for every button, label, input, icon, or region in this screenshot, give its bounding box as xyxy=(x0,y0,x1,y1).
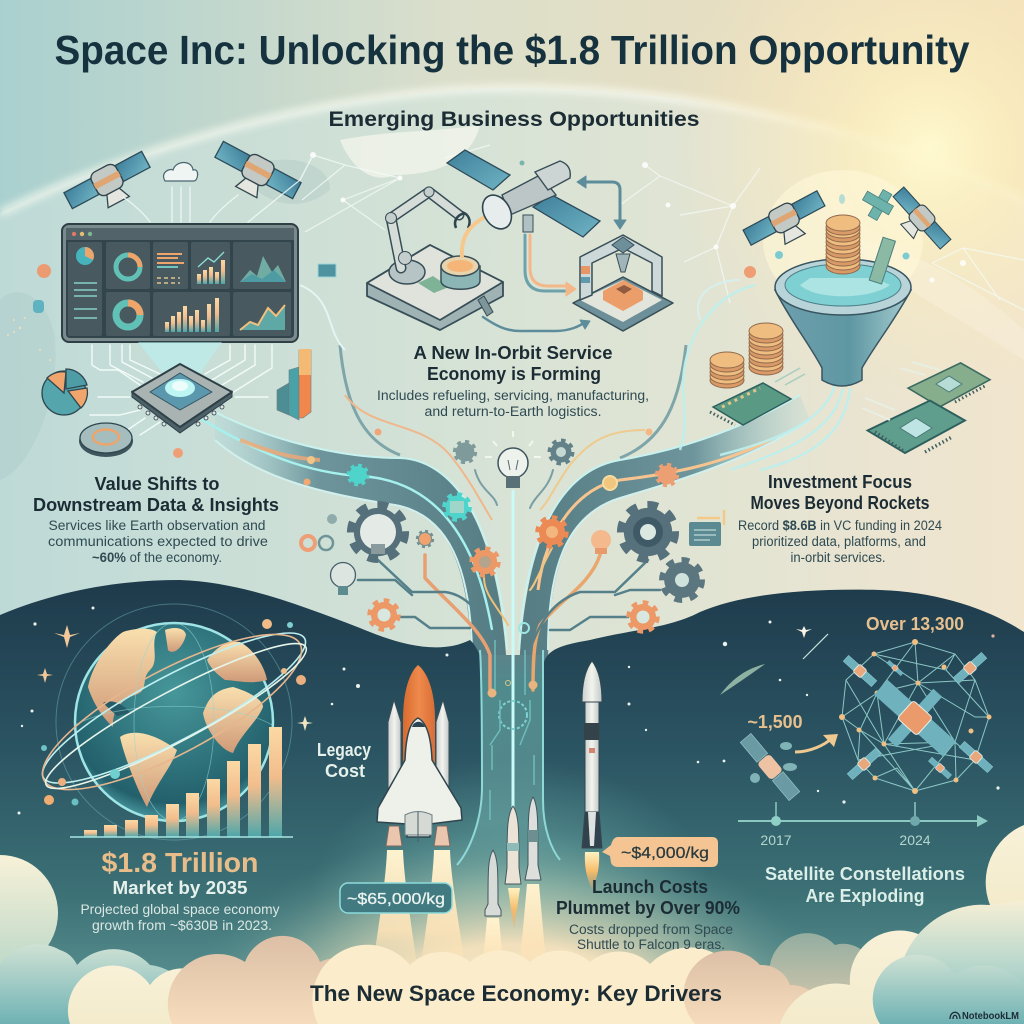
funnel glow xyxy=(763,170,923,310)
stat: 1.8 trillion: $1.8 Trillion xyxy=(102,847,258,878)
icon: big gear right xyxy=(622,506,674,558)
text: launch costs: Costs dropped from Space xyxy=(569,922,733,937)
icon: pie chart xyxy=(42,369,87,415)
stars xyxy=(342,642,727,763)
text: investment focus: Investment Focus xyxy=(768,472,912,492)
icon: satellite left xyxy=(62,148,158,223)
cloud: left low cream xyxy=(68,966,270,1024)
network nodes xyxy=(310,152,966,282)
timeline: 2024 xyxy=(899,832,931,848)
cloud: left cream xyxy=(0,855,58,971)
text: in-orbit service: A New In-Orbit Service xyxy=(414,343,612,363)
text: value shifts xyxy=(33,474,279,565)
icon: orange gear lower right xyxy=(629,603,657,631)
legacy cost label xyxy=(317,740,371,781)
panel: downstream data illustration xyxy=(33,138,336,458)
panel: market growth globe xyxy=(18,604,333,933)
icon: teal node on band xyxy=(348,465,368,485)
cloud: left peach xyxy=(168,936,400,1024)
text: market by 2035: growth from ~$630B in 2023. xyxy=(92,918,272,933)
icon: 3d bars xyxy=(277,349,311,420)
text: value shifts: communications expected to drive xyxy=(48,534,268,549)
text: in-orbit service: and return-to-Earth logistics. xyxy=(424,404,602,419)
text: value shifts: ~60% of the economy. xyxy=(92,550,222,565)
circuit traces: column xyxy=(490,640,534,820)
text: launch costs xyxy=(556,877,740,952)
legacy cost label: Cost xyxy=(325,761,365,781)
label: about 1,500: ~1,500 xyxy=(748,712,802,732)
gears and circuit tree xyxy=(301,431,724,880)
globe halo xyxy=(56,604,292,840)
text: investment focus: in-orbit services. xyxy=(790,550,886,565)
cloud: right large cream xyxy=(780,931,993,1024)
icon: gear top right xyxy=(550,440,572,464)
cloud: centre xyxy=(312,945,744,1024)
panel: in-orbit service illustration xyxy=(367,150,673,331)
panel: investment funnel illustration xyxy=(710,170,990,453)
globe xyxy=(75,623,273,821)
cloud: right big xyxy=(898,900,1024,1024)
bar chart: market growth xyxy=(70,727,293,837)
icon: disc xyxy=(79,423,133,457)
icon: components xyxy=(775,190,910,260)
icon: big gear with bulb xyxy=(352,506,404,558)
footer heading: The New Space Economy: Key Drivers xyxy=(310,981,722,1006)
dark lower section xyxy=(0,580,1024,1024)
text: in-orbit service: Includes refueling, servicing, manufacturing, xyxy=(377,388,649,403)
arcs around centre xyxy=(300,280,740,520)
icon: falcon 9 rocket xyxy=(582,661,602,848)
text: launch costs: Shuttle to Falcon 9 eras. xyxy=(577,937,725,952)
chip xyxy=(132,364,232,433)
icon: orange gear centre left xyxy=(472,549,498,575)
central glowing line xyxy=(512,490,514,880)
icon: coin stack short xyxy=(710,352,744,388)
text: investment focus: Moves Beyond Rockets xyxy=(750,493,930,513)
icon: gear top left xyxy=(455,442,475,462)
icon: satellite right xyxy=(207,138,303,213)
icon: orange gear on right band xyxy=(538,518,566,546)
icon: card falling into funnel xyxy=(869,237,895,284)
cloud: right peach xyxy=(684,951,830,1024)
icon: yellow ring node xyxy=(603,476,617,490)
flow band: right xyxy=(519,395,810,670)
circuit connectors xyxy=(90,345,272,435)
text: value shifts: Value Shifts to xyxy=(94,474,220,494)
signal lines xyxy=(123,155,313,222)
price pill: legacy xyxy=(340,883,452,913)
text: launch costs: Launch Costs xyxy=(592,877,708,897)
central column xyxy=(457,650,560,865)
robot platform xyxy=(367,187,503,330)
arrow: growth xyxy=(795,734,838,752)
arrows: service loop xyxy=(483,176,626,331)
text: investment focus xyxy=(738,472,942,565)
flow band: left xyxy=(200,412,507,670)
text: satellite constellations xyxy=(765,864,965,906)
icon: central lightbulb xyxy=(485,431,541,488)
icon: small bulb left xyxy=(330,562,356,595)
glowing flow from funnel xyxy=(680,285,850,470)
icon: small badges xyxy=(33,264,336,458)
icon: satellite right of funnel xyxy=(884,185,953,258)
network sphere xyxy=(839,639,992,794)
text: satellite constellations: Satellite Constellations xyxy=(765,864,965,884)
icon: satellite left of funnel xyxy=(741,187,832,259)
icon: circuit board right xyxy=(900,362,990,407)
panel: satellite constellations xyxy=(720,614,1000,906)
flames: small rockets xyxy=(481,884,548,985)
stars and comet xyxy=(720,620,1000,804)
price pill: legacy: ~$65,000/kg xyxy=(347,891,445,908)
icon: teal gear on band xyxy=(444,494,470,520)
icon: circuit board front xyxy=(862,398,965,453)
funnel body xyxy=(775,259,911,386)
panel: launch illustration xyxy=(317,642,727,985)
text: investment focus: prioritized data, platforms, and xyxy=(752,534,926,549)
icon: cloud xyxy=(164,162,198,181)
flames: shuttle xyxy=(370,850,468,985)
icon: coin stack tall xyxy=(749,323,783,375)
icon: central satellite xyxy=(858,662,972,774)
dashboard xyxy=(62,224,298,342)
network constellation lines xyxy=(302,145,1024,310)
icon: note block xyxy=(689,510,724,546)
cloud: right low teal xyxy=(873,955,1024,1024)
stars xyxy=(18,606,333,814)
icon: orange node on right band xyxy=(657,465,677,485)
icon: small satellites in network xyxy=(843,652,993,780)
cloud: right upper cream xyxy=(986,825,1024,905)
icon: small rockets xyxy=(485,797,541,916)
timeline: 2017 xyxy=(760,832,792,848)
cloud: right grey xyxy=(751,933,895,1024)
text: in-orbit service: Economy is Forming xyxy=(427,364,601,384)
price pill: falcon: ~$4,000/kg xyxy=(621,845,709,862)
icon: small decorations xyxy=(301,514,337,550)
orbit beads xyxy=(41,619,306,806)
orbits xyxy=(24,607,320,817)
legacy cost label: Legacy xyxy=(317,740,371,760)
text: market by 2035 xyxy=(80,878,280,933)
text: investment focus: Record $8.6B in VC funding in 2024 xyxy=(738,518,942,533)
icon: 3d printer xyxy=(573,235,673,331)
stat: over 13,300: Over 13,300 xyxy=(866,614,964,634)
clouds xyxy=(0,825,1024,1024)
icon: coin stack in funnel xyxy=(826,215,860,274)
section heading: emerging business opportunities: Emerging Business Opportunities xyxy=(328,108,700,131)
icon: gear lower right xyxy=(662,560,702,600)
icon: debris xyxy=(750,742,797,783)
icon: circuit board left xyxy=(710,368,805,425)
icon: orange dot xyxy=(744,266,756,278)
text: launch costs: Plummet by Over 90% xyxy=(556,898,740,918)
icon: orange gear lower left xyxy=(370,601,398,629)
circuit traces: orange xyxy=(358,470,660,690)
light beam xyxy=(138,342,222,385)
satellite with dish xyxy=(447,150,600,237)
price pill: falcon xyxy=(602,837,718,867)
text: value shifts: Downstream Data & Insights xyxy=(33,495,279,515)
circuit terminals xyxy=(488,623,538,729)
brand: notebooklm: NotebookLM xyxy=(962,1010,1019,1022)
icon: small orange gear xyxy=(417,531,433,547)
timeline xyxy=(738,802,988,848)
flame: falcon xyxy=(585,852,599,890)
text: value shifts: Services like Earth observation and xyxy=(48,518,266,533)
text: satellite constellations: Are Exploding xyxy=(806,886,924,906)
text: market by 2035: Projected global space economy xyxy=(80,902,280,917)
text: market by 2035: Market by 2035 xyxy=(112,878,248,898)
title: Space Inc: Unlocking the $1.8 Trillion Opportunity xyxy=(54,27,970,73)
text: in-orbit service xyxy=(377,343,649,419)
icon: single satellite xyxy=(739,733,801,801)
icon: space shuttle xyxy=(377,665,462,846)
cloud: left teal xyxy=(0,944,220,1024)
icon: orange bulb xyxy=(591,530,611,554)
